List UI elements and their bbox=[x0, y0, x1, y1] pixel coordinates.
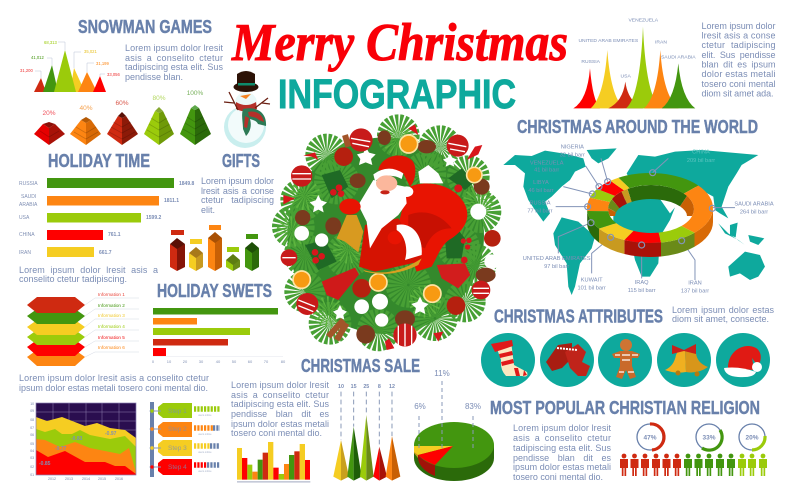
panel: christmas around the world bbox=[503, 117, 774, 295]
bar chart: holiday swets: 0 bbox=[152, 359, 155, 364]
bar chart: holiday time: 1599.2 bbox=[146, 215, 162, 221]
chart: stacked area: -0.85 bbox=[39, 461, 51, 467]
chart: 3d pie bbox=[414, 369, 494, 481]
map labels: RUSSIA bbox=[529, 201, 551, 207]
text block: holiday time bbox=[19, 265, 158, 284]
santa face bbox=[376, 175, 397, 191]
chart: stepped pyramids: 40% bbox=[79, 105, 93, 112]
chart: stacked area: 07 bbox=[30, 426, 34, 430]
doughnut chart: top surface and walls bbox=[587, 173, 713, 257]
map labels: 97 bil barr bbox=[544, 264, 569, 270]
donut charts: 20% bbox=[745, 434, 759, 442]
bar chart: holiday swets: 10 bbox=[167, 359, 172, 364]
text block: top right: lresit asis a conse bbox=[702, 30, 776, 40]
panel: top right peaks bbox=[573, 17, 776, 108]
map labels: VENEZUELA bbox=[530, 160, 564, 166]
panel: christmas sale bbox=[301, 356, 494, 481]
chart: spike values bbox=[333, 384, 400, 481]
bar chart: holiday time: 761.1 bbox=[108, 232, 121, 238]
text block: gifts: ctetur tadipiscing bbox=[201, 195, 274, 205]
map labels: LIBYA bbox=[533, 180, 549, 186]
chart: curved peaks: USA bbox=[621, 74, 631, 80]
text block: religion: pendisse blan dit es bbox=[513, 453, 612, 463]
bar chart: holiday time: 1849.8 bbox=[179, 181, 195, 187]
text block: christmas attributes: diom sit amet, consecte. bbox=[672, 314, 769, 324]
holly leaves bbox=[305, 168, 475, 270]
panel: gifts bbox=[170, 151, 274, 271]
text block: centre column: tosero coni mental dio. bbox=[231, 428, 322, 438]
chart: stacked area: 04 bbox=[30, 449, 34, 453]
chart: curved peaks: UNITED ARAB EMIRATES bbox=[578, 38, 639, 44]
chart: hexagon stack: Information 1 bbox=[98, 292, 125, 297]
text block: centre column: asis a conselito ctetur bbox=[231, 390, 329, 400]
chart: hexagon stack: Information 5 bbox=[98, 335, 125, 340]
chart: stepped pyramids bbox=[34, 90, 211, 145]
chart: stacked area: 09 bbox=[30, 409, 34, 413]
red bows bbox=[322, 268, 359, 300]
chart: stacked area: 01 bbox=[30, 473, 34, 477]
chart: hexagon stack: Information 4 bbox=[98, 324, 125, 329]
icon: santa hat bbox=[716, 333, 770, 387]
pine needle tufts bbox=[283, 125, 491, 341]
text block: top right: blan dit es ipsum bbox=[702, 60, 776, 70]
chart: stacked area: 03 bbox=[30, 456, 34, 460]
text block: christmas attributes: Lorem ipsum dolor estas bbox=[672, 305, 774, 315]
chart: hexagon stack: Information 2 bbox=[98, 303, 125, 308]
bar chart: holiday swets: 60 bbox=[248, 359, 253, 364]
chart: triangle peaks: 31,200 bbox=[20, 68, 33, 73]
chart: stacked area bbox=[30, 402, 136, 481]
chart: stacked area: 10 bbox=[30, 402, 34, 406]
map labels: 209 bil barr bbox=[687, 158, 715, 164]
text block: religion bbox=[513, 423, 612, 482]
people pictogram bbox=[620, 454, 767, 476]
subtitle: Infographic: INFOGRAPHIC bbox=[278, 71, 516, 117]
bar chart: holiday swets: 20 bbox=[183, 359, 188, 364]
text block: area chart intro bbox=[19, 373, 209, 393]
chart: stepped pyramids: 20% bbox=[42, 110, 56, 117]
chart: curved peaks: VENEZUELA bbox=[628, 17, 659, 23]
text block: religion: tadipiscing esta elit. Sus bbox=[513, 443, 612, 453]
chart: step tags with people: users online bbox=[198, 433, 212, 436]
chart: step tags with people: Step 1 bbox=[168, 408, 187, 415]
text block: centre column bbox=[231, 380, 330, 438]
text block: religion: tosero coni mental dio. bbox=[513, 472, 603, 482]
chart: curved peaks: IRAN bbox=[655, 39, 667, 45]
map labels: 264 bil barr bbox=[740, 209, 768, 215]
wreath cinnamon bbox=[328, 320, 347, 340]
icon: gingerbread man bbox=[598, 333, 652, 387]
chart: step tags with people: Step 2 bbox=[168, 426, 187, 433]
panel: holiday swets bbox=[152, 281, 286, 364]
wreath pine cones bbox=[295, 130, 496, 344]
bar chart: holiday time: 1811.1 bbox=[164, 198, 179, 204]
text block: gifts: Lorem ipsum dolor bbox=[201, 176, 274, 186]
text block: top right: Lorem ipsum dolor bbox=[702, 21, 776, 31]
text block: holiday time: conselito ctetur tadipiscing. bbox=[19, 274, 127, 284]
panel: holiday time bbox=[19, 151, 195, 284]
chart: hexagon stack: Information 6 bbox=[98, 345, 125, 350]
map labels: 101 bil barr bbox=[578, 285, 606, 291]
bar chart: holiday time: SAUDI bbox=[21, 194, 36, 200]
chart: triangle peaks: 68,313 bbox=[44, 40, 57, 45]
text block: top right: elit. Sus pendisse bbox=[702, 50, 776, 60]
map leader lines bbox=[556, 158, 735, 280]
chart: stacked area: -0.77 bbox=[55, 446, 67, 452]
chart: step tags with people: Step 4 bbox=[168, 464, 187, 471]
chart: hexagon stack: Information 3 bbox=[98, 313, 125, 318]
santa gloves and fur cuff bbox=[397, 224, 422, 260]
map labels: 32 bil barr bbox=[560, 152, 585, 158]
chart: stacked area: 02 bbox=[30, 465, 34, 469]
heading: christmas attributes: CHRISTMAS ATTRIBUTES bbox=[494, 306, 663, 326]
chart: step tags with people: users online bbox=[198, 414, 212, 417]
text block: top right: dolor estas metali bbox=[702, 69, 776, 79]
text block: snowman games: asis a conselito ctetur bbox=[125, 53, 223, 63]
map labels: NIGERIA bbox=[561, 144, 584, 150]
bar chart: holiday time bbox=[19, 178, 195, 257]
text block: snowman games: tadipiscing esta elit. Sus bbox=[125, 62, 224, 72]
chart: stepped pyramids: 60% bbox=[115, 100, 129, 107]
text block: area chart intro: Lorem ipsum dolor lresit asis a conselito ctetur bbox=[19, 373, 209, 383]
santa coat bbox=[359, 218, 422, 272]
text block: snowman games: Lorem ipsum dolor lresit bbox=[125, 43, 223, 53]
text block: centre column: tadipiscing esta elit. Sus bbox=[231, 399, 330, 409]
bar chart: holiday time: USA bbox=[19, 215, 30, 221]
chart: stepped pyramids: 100% bbox=[187, 90, 204, 97]
chart: stacked area: -0.97 bbox=[105, 431, 117, 437]
map nodes bbox=[585, 170, 715, 248]
map labels: SAUDI ARABIA bbox=[734, 201, 774, 207]
text block: area chart intro: ipsum dolor estas metali tosero coni mental dio. bbox=[19, 383, 208, 393]
text block: top right bbox=[702, 21, 776, 98]
panel: most popular christian religion bbox=[490, 398, 767, 482]
chart: 3d pie: 6% bbox=[414, 402, 426, 411]
text block: top right: diom sit amet ada. bbox=[702, 88, 774, 98]
bar chart: holiday time: ARABIA bbox=[19, 202, 38, 208]
map labels bbox=[523, 144, 774, 295]
chart: curved peaks bbox=[573, 17, 696, 108]
santa sack bbox=[398, 183, 467, 272]
map labels: UNITED ARAB EMIRATES bbox=[523, 256, 591, 262]
donut charts bbox=[637, 424, 765, 450]
wreath plain baubles bbox=[334, 147, 501, 315]
map labels: IRAN bbox=[688, 281, 702, 287]
title: Merry Christmas: Merry Christmas bbox=[231, 14, 568, 72]
icon: bells bbox=[657, 333, 711, 387]
chart: spike values: 12 bbox=[389, 384, 395, 390]
text block: gifts: elit. bbox=[201, 205, 215, 215]
chart: triangle peaks: 35,021 bbox=[84, 49, 97, 54]
chart: curved peaks: RUSSIA bbox=[581, 59, 601, 65]
map labels: 77 bil barr bbox=[527, 209, 553, 215]
bar chart: holiday time: 661.7 bbox=[99, 250, 112, 256]
map labels: KUWAIT bbox=[581, 277, 603, 283]
chart: spike values: 15 bbox=[351, 384, 357, 390]
chart: 3d columns bbox=[170, 225, 259, 271]
map labels: IRAQ bbox=[635, 280, 649, 286]
text block: top right: ctetur tadipiscing bbox=[702, 40, 776, 50]
text block: gifts bbox=[201, 176, 274, 215]
text block: religion: ipsum dolor estas metali bbox=[513, 462, 611, 472]
chart: stacked area: 08 bbox=[30, 418, 34, 422]
chart: hexagon stack bbox=[27, 292, 139, 366]
chart: 3d pie: 83% bbox=[465, 402, 481, 411]
map labels: 41 bil barr bbox=[534, 168, 559, 174]
text block: holiday time: Lorem ipsum dolor lresit asis a bbox=[19, 265, 158, 275]
chart: triangle peaks: 31,199 bbox=[96, 61, 109, 66]
heading: holiday time: HOLIDAY TIME bbox=[48, 151, 150, 171]
chart: stacked area: 2016 bbox=[115, 477, 123, 481]
chart: 3d pie: 11% bbox=[434, 369, 450, 378]
text block: gifts: lresit asis a conse bbox=[201, 186, 274, 196]
chart: stacked area: 2014 bbox=[82, 477, 90, 481]
bar chart: holiday swets: 40 bbox=[216, 359, 221, 364]
bar chart: colored columns bbox=[237, 442, 310, 483]
illustration: christmas wreath with santa bbox=[281, 124, 501, 350]
text block: centre column: pendisse blan dit es bbox=[231, 409, 330, 419]
chart: stepped pyramids: 80% bbox=[152, 95, 166, 102]
chart: spike values: 25 bbox=[363, 384, 369, 390]
chart: stacked area: -0.83 bbox=[71, 436, 83, 442]
chart: step tags with people: users online bbox=[198, 470, 212, 473]
chart: triangle peaks bbox=[20, 40, 120, 92]
donut charts: 33% bbox=[702, 434, 716, 442]
chart: stacked area: 06 bbox=[30, 433, 34, 437]
heading: christmas sale: CHRISTMAS SALE bbox=[301, 356, 420, 376]
chart: spike values: 10 bbox=[338, 384, 344, 390]
chart: stacked area: 05 bbox=[30, 442, 34, 446]
text block: top right: tosero coni mental bbox=[702, 79, 776, 89]
text block: centre column: Lorem ipsum dolor lresit bbox=[231, 380, 329, 390]
world map bbox=[503, 148, 765, 295]
icon: mittens bbox=[540, 333, 594, 387]
text block: christmas attributes bbox=[672, 305, 774, 324]
text block: centre column: ipsum dolor estas metali bbox=[231, 419, 329, 429]
text block: snowman games: pendisse blan. bbox=[125, 72, 183, 82]
text block: religion: Lorem ipsum dolor lresit bbox=[513, 423, 611, 433]
heading: gifts: GIFTS bbox=[222, 151, 260, 171]
chart: stacked area: 2015 bbox=[98, 477, 106, 481]
bar chart: holiday time: RUSSIA bbox=[19, 181, 38, 187]
wreath berries bbox=[283, 124, 482, 350]
map labels: 115 bil barr bbox=[628, 288, 656, 294]
chart: curved peaks: SAUDI ARABIA bbox=[661, 55, 696, 61]
chart: step tags with people bbox=[150, 402, 220, 477]
santa lantern bbox=[337, 215, 363, 252]
donut charts: 47% bbox=[643, 434, 657, 442]
chart: spike values: 8 bbox=[378, 384, 381, 390]
bar chart: holiday swets bbox=[152, 308, 286, 364]
heading: snowman games: SNOWMAN GAMES bbox=[78, 17, 212, 37]
wreath snow bbox=[294, 147, 499, 327]
bar chart: holiday swets: 80 bbox=[281, 359, 286, 364]
wreath striped baubles bbox=[281, 128, 490, 347]
bar chart: holiday swets: 30 bbox=[199, 359, 204, 364]
map labels: 46 bil barr bbox=[528, 188, 554, 194]
panel: snowman games bbox=[20, 17, 224, 145]
icon: snowman bbox=[224, 71, 270, 148]
chart: step tags with people: users online bbox=[198, 451, 212, 454]
chart: triangle peaks: 41,012 bbox=[31, 55, 44, 60]
santa beard bbox=[358, 180, 407, 248]
icon: stocking bbox=[481, 333, 535, 387]
text block: religion: asis a conselito ctetur bbox=[513, 433, 611, 443]
chart: stacked area: 2012 bbox=[48, 477, 56, 481]
santa hat bbox=[378, 156, 415, 187]
wreath oranges bbox=[293, 135, 482, 302]
heading: holiday swets: HOLIDAY SWETS bbox=[157, 281, 272, 301]
map labels: 137 bil barr bbox=[681, 289, 709, 295]
text block: snowman games bbox=[125, 43, 224, 82]
bar chart: holiday time: CHINA bbox=[19, 232, 35, 238]
panel: christmas attributes bbox=[481, 305, 774, 387]
bar chart: holiday swets: 50 bbox=[232, 359, 237, 364]
bar chart: holiday time: IRAN bbox=[19, 250, 31, 256]
map labels: CHINA bbox=[692, 150, 710, 156]
chart: step tags with people: Step 3 bbox=[168, 445, 187, 452]
chart: stacked area: 2013 bbox=[65, 477, 73, 481]
chart: triangle peaks: 33,056 bbox=[107, 72, 120, 77]
bar chart: holiday swets: 70 bbox=[264, 359, 269, 364]
